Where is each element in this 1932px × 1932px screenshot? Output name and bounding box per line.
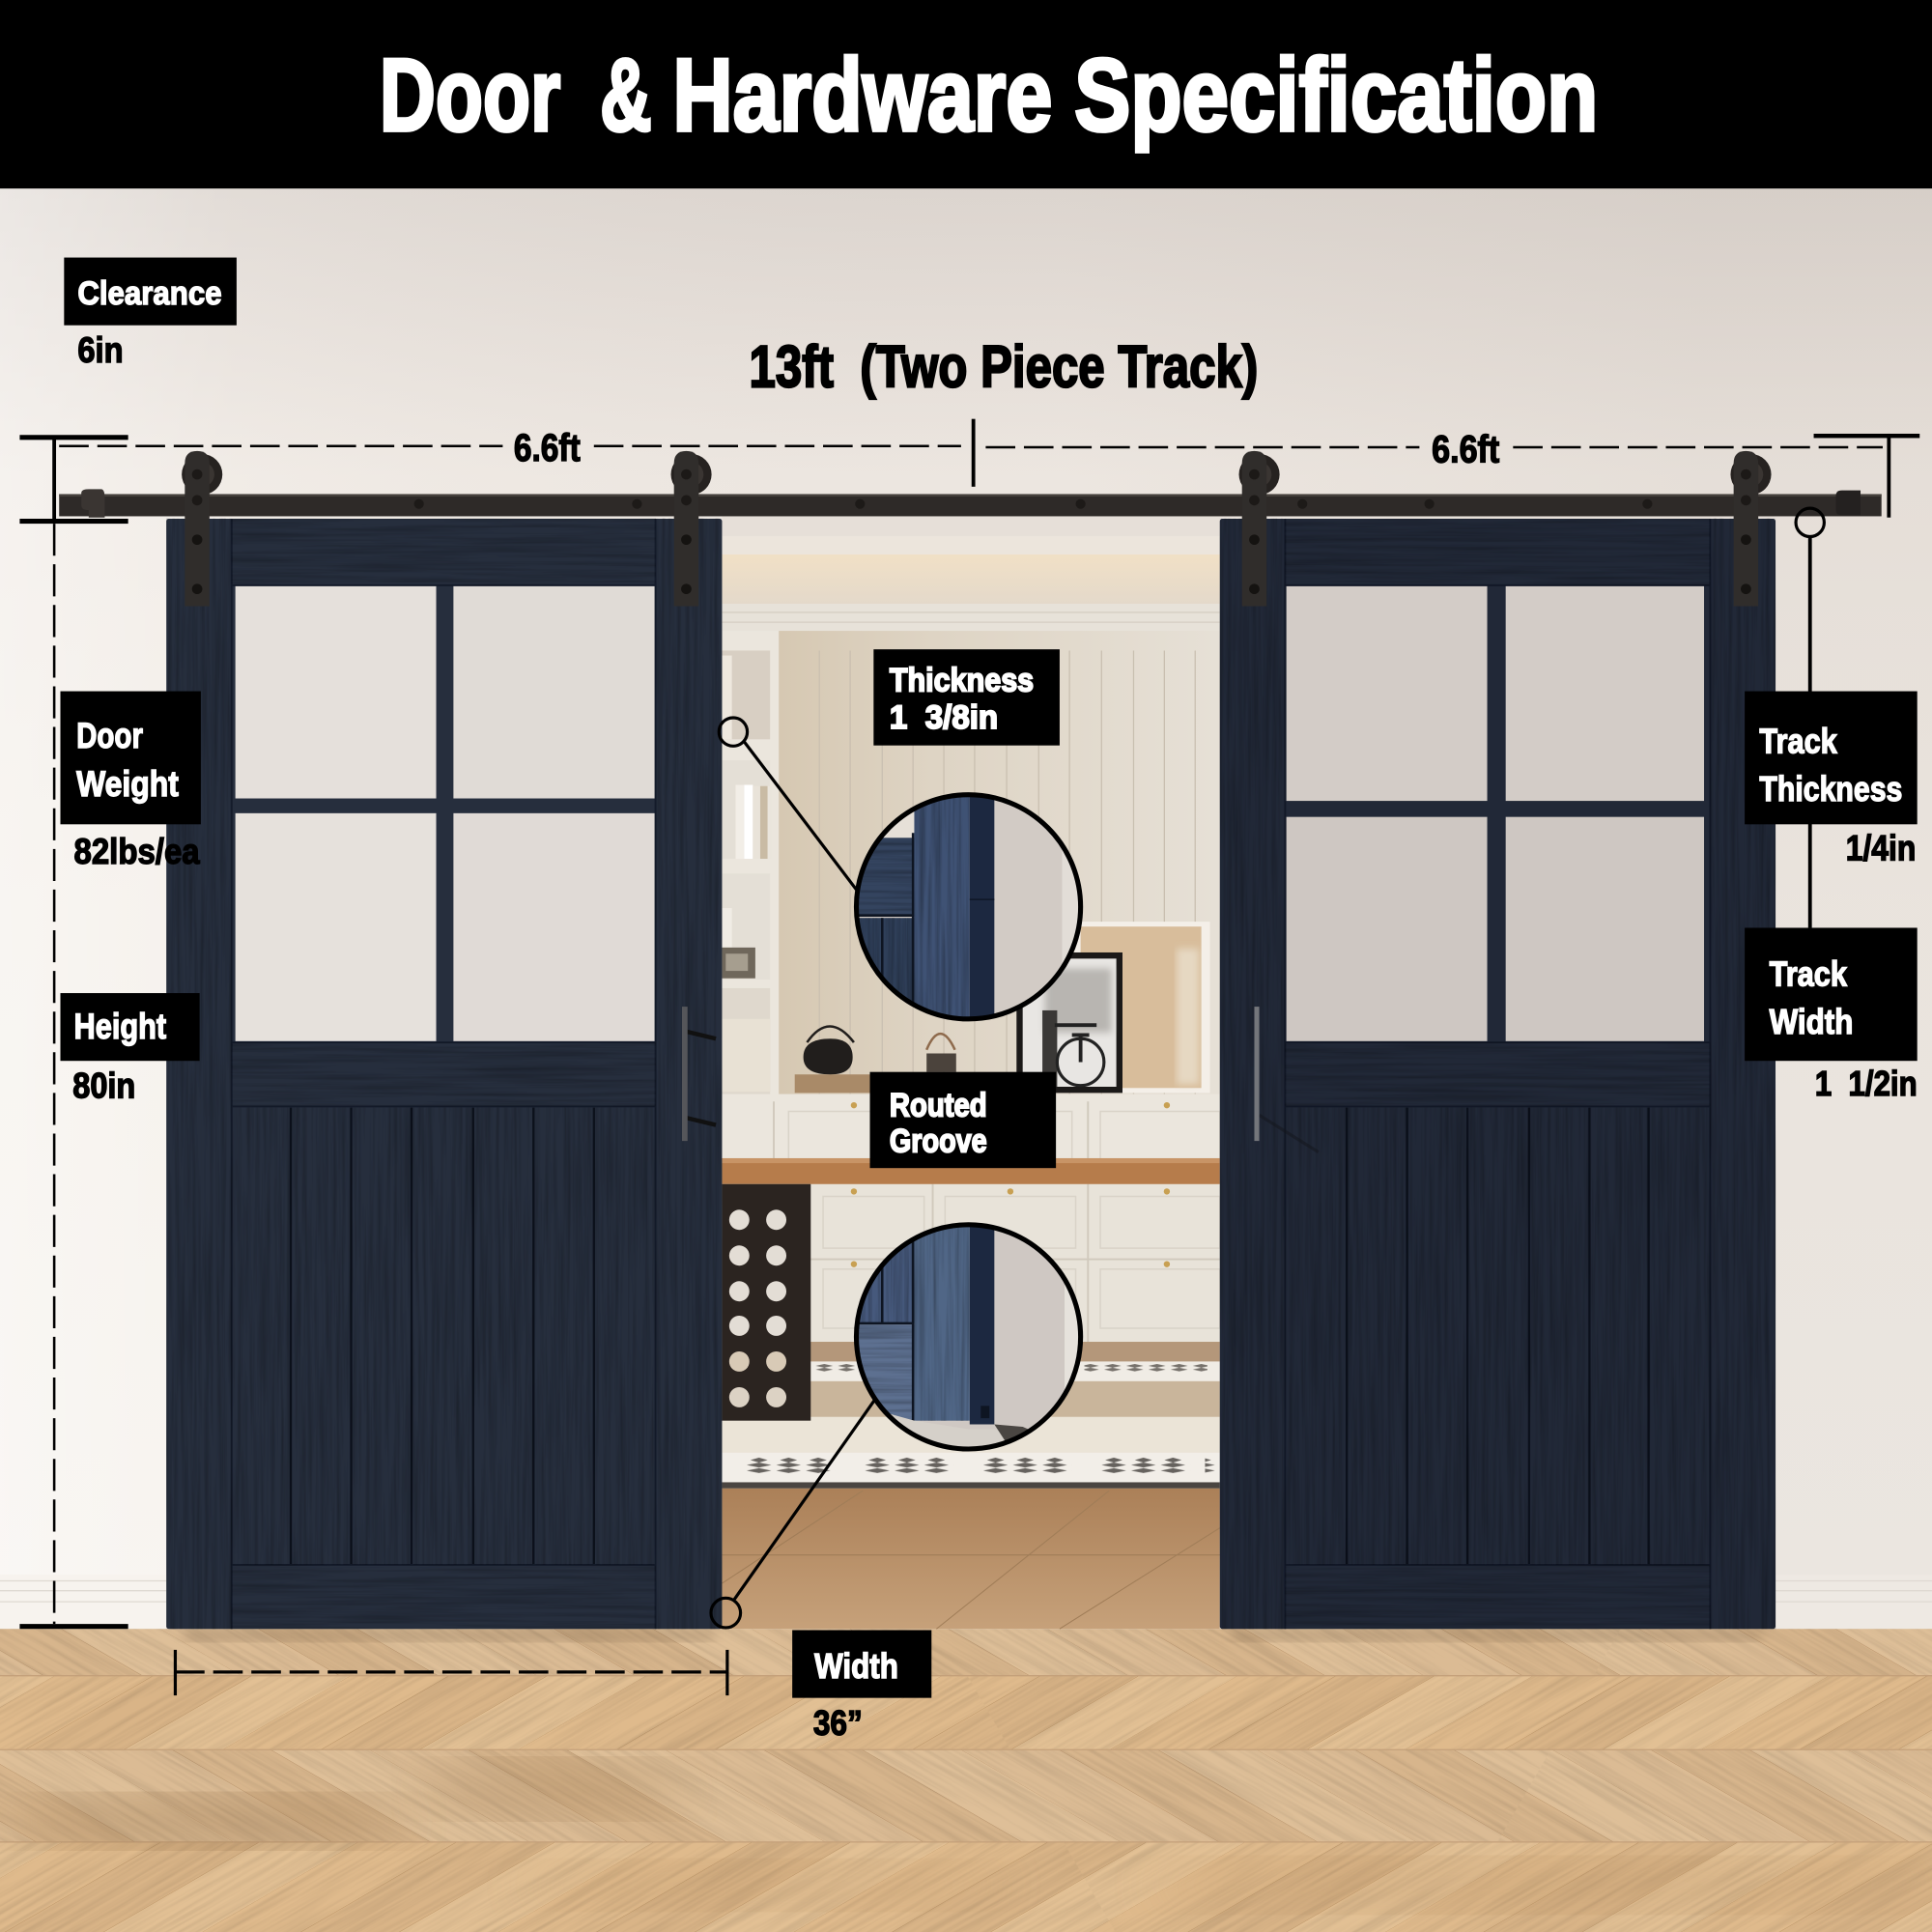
total track length heading: 13ft (Two Piece Track) (750, 334, 1258, 400)
track thickness label: 1/4in (1846, 828, 1916, 867)
cabinets and counter (722, 1094, 1220, 1342)
wall (0, 188, 1932, 1629)
track thickness label: Thickness (1759, 770, 1902, 809)
door weight label (60, 692, 201, 871)
title: Specification (1074, 37, 1598, 153)
track thickness label: Track (1759, 722, 1837, 760)
title: Door (380, 37, 560, 153)
height label (60, 993, 200, 1105)
right door glass panes (1287, 585, 1704, 1041)
clearance label: Clearance (77, 275, 222, 312)
barn door track (59, 489, 1882, 518)
title: & (600, 37, 652, 153)
right track dimension: 6.6ft (1432, 428, 1499, 470)
routed groove label (870, 1072, 1056, 1168)
herringbone floor (0, 1629, 1932, 1932)
routed groove magnifier (856, 1225, 1081, 1449)
title (380, 37, 1598, 153)
width label (792, 1631, 931, 1743)
width label: Width (814, 1647, 898, 1686)
perforated desk leg (722, 1184, 810, 1421)
centre tick (972, 419, 976, 487)
track width label: Track (1770, 954, 1847, 993)
right end bracket (1814, 434, 1919, 518)
room seen through the opening (722, 516, 1220, 1629)
title: Hardware (672, 37, 1052, 153)
teapots (795, 1026, 956, 1093)
thickness label: Thickness (890, 663, 1034, 699)
hanger strap 1 (182, 451, 222, 607)
hanger strap 3 (1239, 451, 1280, 607)
door weight label: Weight (76, 764, 179, 804)
hanger strap 2 (671, 451, 712, 607)
left door planks (232, 519, 656, 1629)
header bar (0, 0, 1932, 188)
thickness label: 1 3/8in (890, 699, 998, 736)
height label: Height (74, 1007, 166, 1046)
track width label: 1 1/2in (1815, 1065, 1918, 1103)
beadboard back wall (779, 631, 1220, 1094)
left track dimension: 6.6ft (514, 427, 581, 469)
track width label: Width (1770, 1003, 1853, 1041)
door weight label: 82lbs/ea (74, 832, 200, 871)
routed groove callout leader (711, 1400, 875, 1628)
floor and rug inside the room (722, 1342, 1220, 1629)
track callout ring and leader (1796, 508, 1824, 927)
thickness magnifier (856, 795, 1081, 1019)
door weight label: Door (76, 716, 143, 755)
track thickness label (1745, 692, 1918, 867)
height label: 80in (72, 1065, 135, 1105)
right barn door (1220, 519, 1776, 1629)
track width label (1745, 927, 1918, 1103)
clearance label (64, 258, 237, 370)
door height dimension (19, 524, 128, 1629)
door width dimension (174, 1650, 728, 1695)
left door handle (682, 1007, 716, 1141)
right door handle (1254, 1007, 1319, 1152)
routed groove label: Routed (890, 1088, 987, 1124)
clearance label: 6in (77, 330, 124, 370)
left barn door (166, 519, 722, 1629)
left door glass panes (236, 585, 656, 1041)
width label: 36” (813, 1704, 863, 1743)
thickness label (873, 649, 1060, 746)
hanger strap 4 (1730, 451, 1772, 607)
right door planks (1285, 519, 1710, 1629)
pictures (1016, 922, 1210, 1093)
thickness callout leader (719, 718, 856, 890)
routed groove label: Groove (890, 1123, 987, 1160)
clearance bracket (19, 435, 128, 524)
book shelves (722, 631, 779, 1094)
